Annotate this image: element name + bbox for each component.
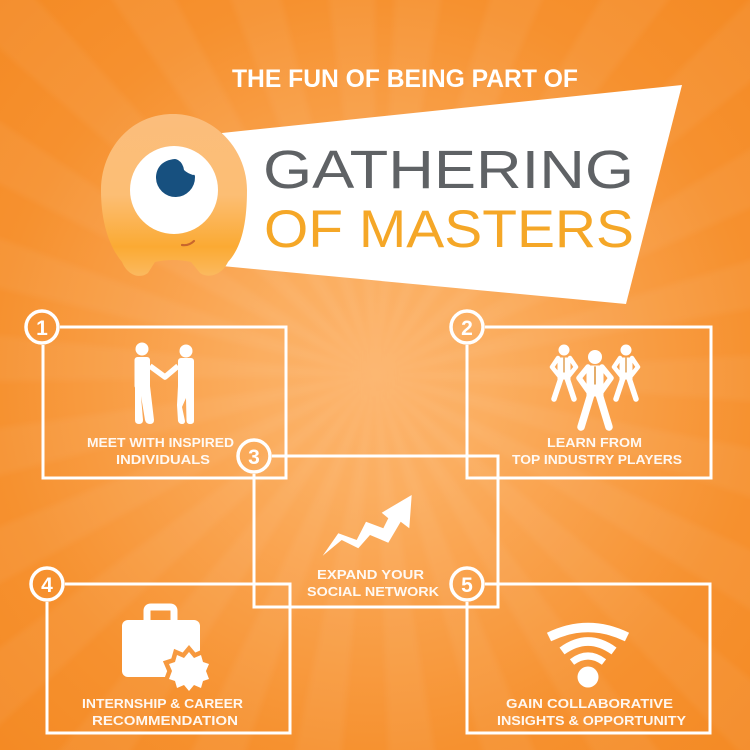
mascot smile (182, 241, 194, 245)
label 5: GAIN COLLABORATIVE (506, 696, 673, 711)
label 5: INSIGHTS & OPPORTUNITY (497, 713, 686, 728)
label 4 (82, 696, 244, 728)
logo text: of masters: OF MASTERS (264, 200, 634, 259)
panel 4: internship and career recommendation (31, 568, 290, 733)
logo text: gathering: GATHERING (263, 140, 634, 200)
panel 5 frame (467, 584, 710, 733)
mascot eye (130, 146, 218, 234)
label 5 (497, 696, 686, 728)
label 2: LEARN FROM (547, 435, 642, 450)
label 3: EXPAND YOUR (317, 567, 425, 582)
icon: briefcase with badge (122, 607, 209, 691)
badge 1 (26, 311, 58, 343)
centre large figure (579, 350, 611, 427)
white banner shape (222, 85, 682, 304)
icon: wifi (549, 628, 627, 688)
star badge (169, 652, 209, 691)
badge 3: 3 (248, 446, 260, 469)
badge 2 (451, 311, 483, 343)
mascot body (101, 114, 247, 276)
panel 5: gain collaborative insights and opportunity (451, 568, 710, 733)
panel 2: learn from top industry players (451, 311, 711, 478)
icon: rising arrow (323, 495, 412, 556)
label 3 (307, 567, 440, 599)
icon: handshake (134, 342, 194, 424)
right small figure (614, 344, 638, 399)
mascot: one-eyed orange monster (101, 114, 247, 276)
label 2: TOP INDUSTRY PLAYERS (512, 452, 682, 467)
title: THE FUN OF BEING PART OF (232, 65, 578, 93)
panel 1: meet with inspired individuals (26, 311, 286, 478)
badge 2: 2 (461, 317, 473, 340)
panel 3: expand your social network (238, 440, 498, 607)
label 2 (512, 435, 682, 467)
badge 3 (238, 440, 270, 472)
icon: three businessmen (552, 344, 638, 427)
badge 5: 5 (461, 574, 473, 597)
badge 4: 4 (41, 574, 53, 597)
panel 1 frame (43, 327, 286, 478)
panel 3 frame (254, 456, 498, 607)
badge 4 (31, 568, 63, 600)
label 1 (87, 435, 234, 467)
left small figure (552, 344, 576, 399)
panel 4 frame (47, 584, 290, 733)
label 4: INTERNSHIP & CAREER (82, 696, 244, 711)
briefcase (122, 607, 200, 677)
badge 5 (451, 568, 483, 600)
label 1: INDIVIDUALS (116, 452, 210, 467)
badge 1: 1 (36, 317, 48, 340)
logo banner (222, 85, 682, 304)
label 3: SOCIAL NETWORK (307, 584, 440, 599)
mascot pupil (156, 159, 195, 197)
panel 2 frame (467, 327, 711, 478)
label 4: RECOMMENDATION (92, 713, 238, 728)
label 1: MEET WITH INSPIRED (87, 435, 234, 450)
